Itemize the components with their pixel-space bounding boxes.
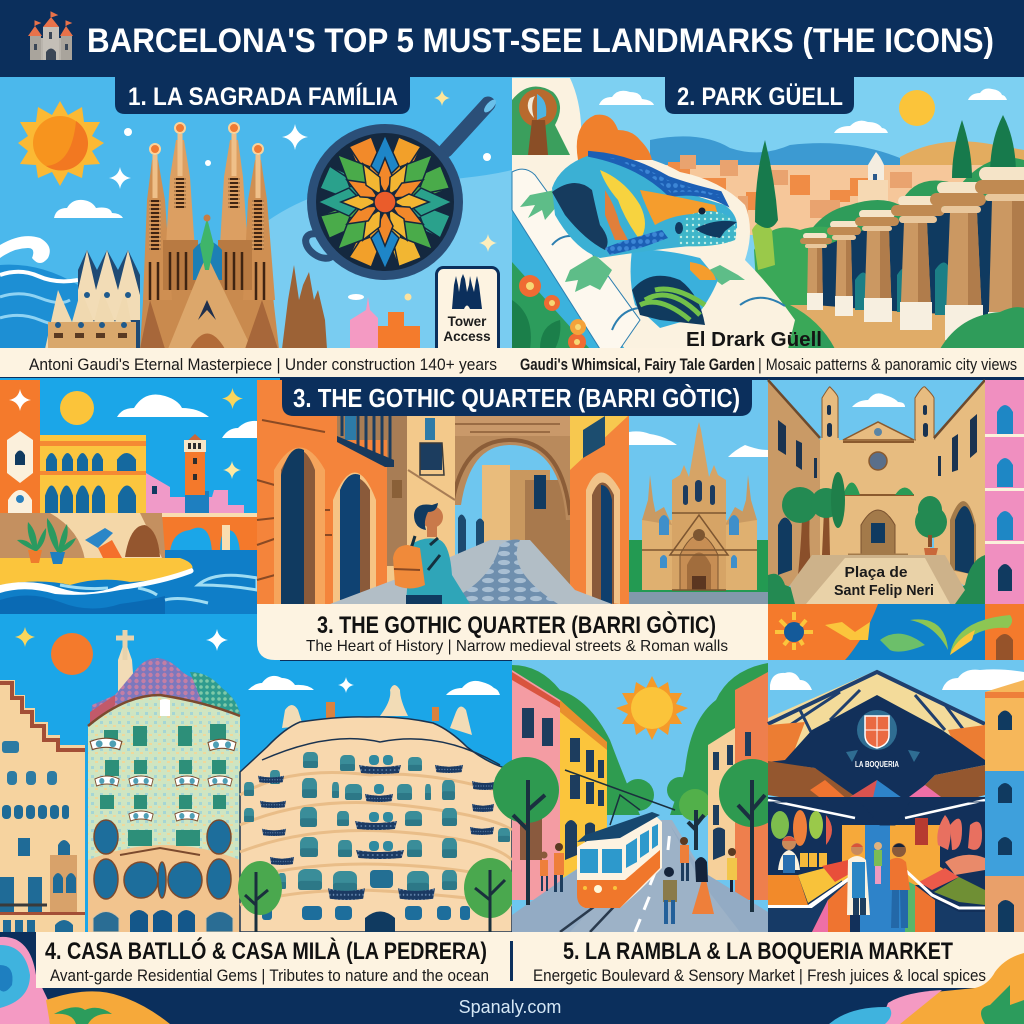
caption: gothic quarter: The Heart of History | Narrow medieval streets & Roman walls [306, 638, 728, 655]
tower access card [436, 268, 498, 358]
casa batllo [88, 630, 240, 932]
sand beach [0, 558, 192, 585]
footer art: right [829, 953, 1024, 1024]
icon: castle [28, 12, 73, 60]
distant arch view [450, 416, 570, 604]
cloud [852, 393, 905, 407]
mouth [695, 221, 737, 238]
roof frame [768, 670, 985, 762]
tower with cross [118, 640, 135, 700]
right buildings [708, 672, 768, 900]
sun and stars [15, 627, 500, 695]
flowers [512, 275, 586, 351]
pill heading: la sagrada familia [115, 77, 410, 114]
stairs and label plaza: Sant Felip Neri [834, 583, 934, 599]
fruit stall left [768, 860, 855, 932]
column shafts [807, 200, 1024, 345]
trees background [512, 663, 768, 821]
panel: gothic quarter [257, 380, 768, 604]
lizard dragon [520, 153, 745, 328]
window rows [244, 752, 510, 892]
bush right [940, 307, 1024, 349]
caption: gothic quarter: 3. THE GOTHIC QUARTER (BARRI GÒTIC) [317, 611, 716, 639]
pink buildings and tower [146, 434, 244, 515]
cloud [54, 200, 123, 218]
panel: coastal scene [0, 378, 280, 668]
sea [0, 550, 257, 614]
yellow building [40, 435, 146, 515]
navy arch with crest: LA BOQUERIA [855, 760, 899, 769]
customer [890, 843, 910, 928]
lower body [631, 250, 718, 328]
caption: casa batllo and casa mila [45, 937, 489, 985]
footer art: left [0, 937, 170, 1024]
meat stall right [905, 855, 985, 932]
column capitals [803, 167, 1024, 239]
sagrada familia towers [140, 123, 279, 349]
gothic small buildings [45, 250, 140, 349]
sand ground [790, 305, 1024, 349]
pill heading: park guell: 2. PARK GÜELL [677, 82, 843, 111]
caption: park guell: Gaudi's Whimsical, Fairy Tale Garden [520, 355, 755, 374]
balcony [337, 416, 394, 467]
pill heading: park guell [665, 77, 854, 114]
shore and rocks [0, 513, 170, 560]
casa amatller [0, 680, 85, 932]
pink building column [985, 380, 1024, 604]
cathedral scene [629, 380, 768, 604]
panel: la boqueria market [768, 660, 1024, 932]
stairs and label plaza [790, 555, 965, 604]
dark colonnade [815, 195, 1024, 318]
orange tower column [0, 380, 40, 518]
street [330, 540, 612, 604]
trees [768, 472, 985, 604]
column bases [807, 293, 1024, 345]
chimneys [282, 685, 472, 735]
pill heading: la sagrada familia: 1. LA SAGRADA FAMÍLIA [128, 82, 398, 111]
orange bush [577, 115, 652, 160]
footer website: Spanaly.com [459, 997, 561, 1017]
hills [790, 158, 1024, 349]
caption: casa batllo and casa mila: 4. CASA BATLLÓ & CASA MILÀ (LA PEDRERA) [45, 937, 487, 965]
decorative art strip [768, 604, 1024, 660]
awning [768, 761, 985, 832]
body [552, 155, 737, 258]
tram [565, 770, 675, 908]
icon: stained glass skillet [301, 98, 498, 280]
hypostyle columns [800, 167, 1024, 345]
sparkles and dots [109, 90, 497, 252]
street trees [493, 757, 785, 912]
cream mosaic surround [512, 78, 795, 349]
road [512, 820, 768, 932]
trees [238, 858, 516, 932]
pill heading: gothic quarter: 3. THE GOTHIC QUARTER (BARRI GÒTIC) [293, 383, 740, 413]
brown spires [282, 265, 327, 349]
tower access card: Tower [448, 314, 487, 329]
pedestrians [540, 837, 737, 924]
hanging produce [771, 810, 982, 850]
panel: casa batllo and casa mila [0, 614, 516, 932]
potted plants [17, 518, 76, 564]
green tree spire [200, 218, 214, 270]
clouds [770, 672, 812, 690]
footer band [0, 988, 1024, 1024]
sun [616, 676, 688, 740]
caption: la rambla and boqueria [533, 938, 986, 985]
navy arch with crest [768, 695, 985, 815]
side walls [768, 380, 820, 604]
waves [0, 236, 78, 349]
legs [520, 190, 558, 220]
right orange wall [570, 416, 629, 604]
tower access card: Access [443, 329, 491, 344]
cypress trees [755, 115, 1016, 228]
caption: sagrada familia [0, 348, 512, 377]
town [660, 152, 990, 235]
left buildings [512, 670, 607, 900]
person with backpack [393, 503, 470, 604]
stalls interior [768, 797, 985, 932]
bell towers [822, 387, 838, 440]
bridge [162, 513, 257, 552]
caption: gothic quarter [257, 604, 768, 660]
caption: casa batllo and casa mila: Avant-garde Residential Gems | Tributes to nature and the ocean [50, 966, 489, 985]
panel: park guell [512, 77, 1024, 351]
vendor in apron and customers [847, 842, 882, 915]
panel: la rambla [493, 660, 785, 932]
sun and clouds [599, 88, 1007, 133]
mountains [650, 136, 1024, 200]
caption: la rambla and boqueria: 5. LA RAMBLA & LA BOQUERIA MARKET [563, 938, 953, 965]
white bench [512, 169, 640, 349]
panel: la sagrada familia [0, 77, 512, 358]
juice vendor [778, 836, 827, 873]
panel: placa de sant felip neri [768, 380, 985, 604]
facade [820, 387, 934, 570]
header background [0, 0, 1024, 78]
sun, clouds, stars [60, 388, 257, 479]
icon: sun [18, 101, 104, 186]
caption: park guell [512, 348, 1024, 377]
beige wall [385, 416, 484, 604]
right facade column [985, 680, 1024, 932]
stairs and label plaza: Plaça de [844, 565, 908, 581]
stone arch [445, 416, 575, 520]
bench blue trough [512, 205, 625, 349]
casa mila [238, 685, 516, 932]
icon: sagrada silhouette [452, 274, 482, 309]
cathedral [642, 422, 757, 590]
label: el drark guell: El Drark Güell [686, 329, 822, 351]
caption band [36, 932, 1024, 988]
facade [88, 695, 240, 932]
icon: keyhole mosaic medallion [512, 87, 570, 155]
pink and orange buildings [348, 294, 420, 349]
caption: sagrada familia: Antoni Gaudi's Eternal Masterpiece | Under construction 140+ years [29, 355, 497, 374]
roof [90, 658, 240, 730]
orange wall with doors [257, 380, 387, 604]
